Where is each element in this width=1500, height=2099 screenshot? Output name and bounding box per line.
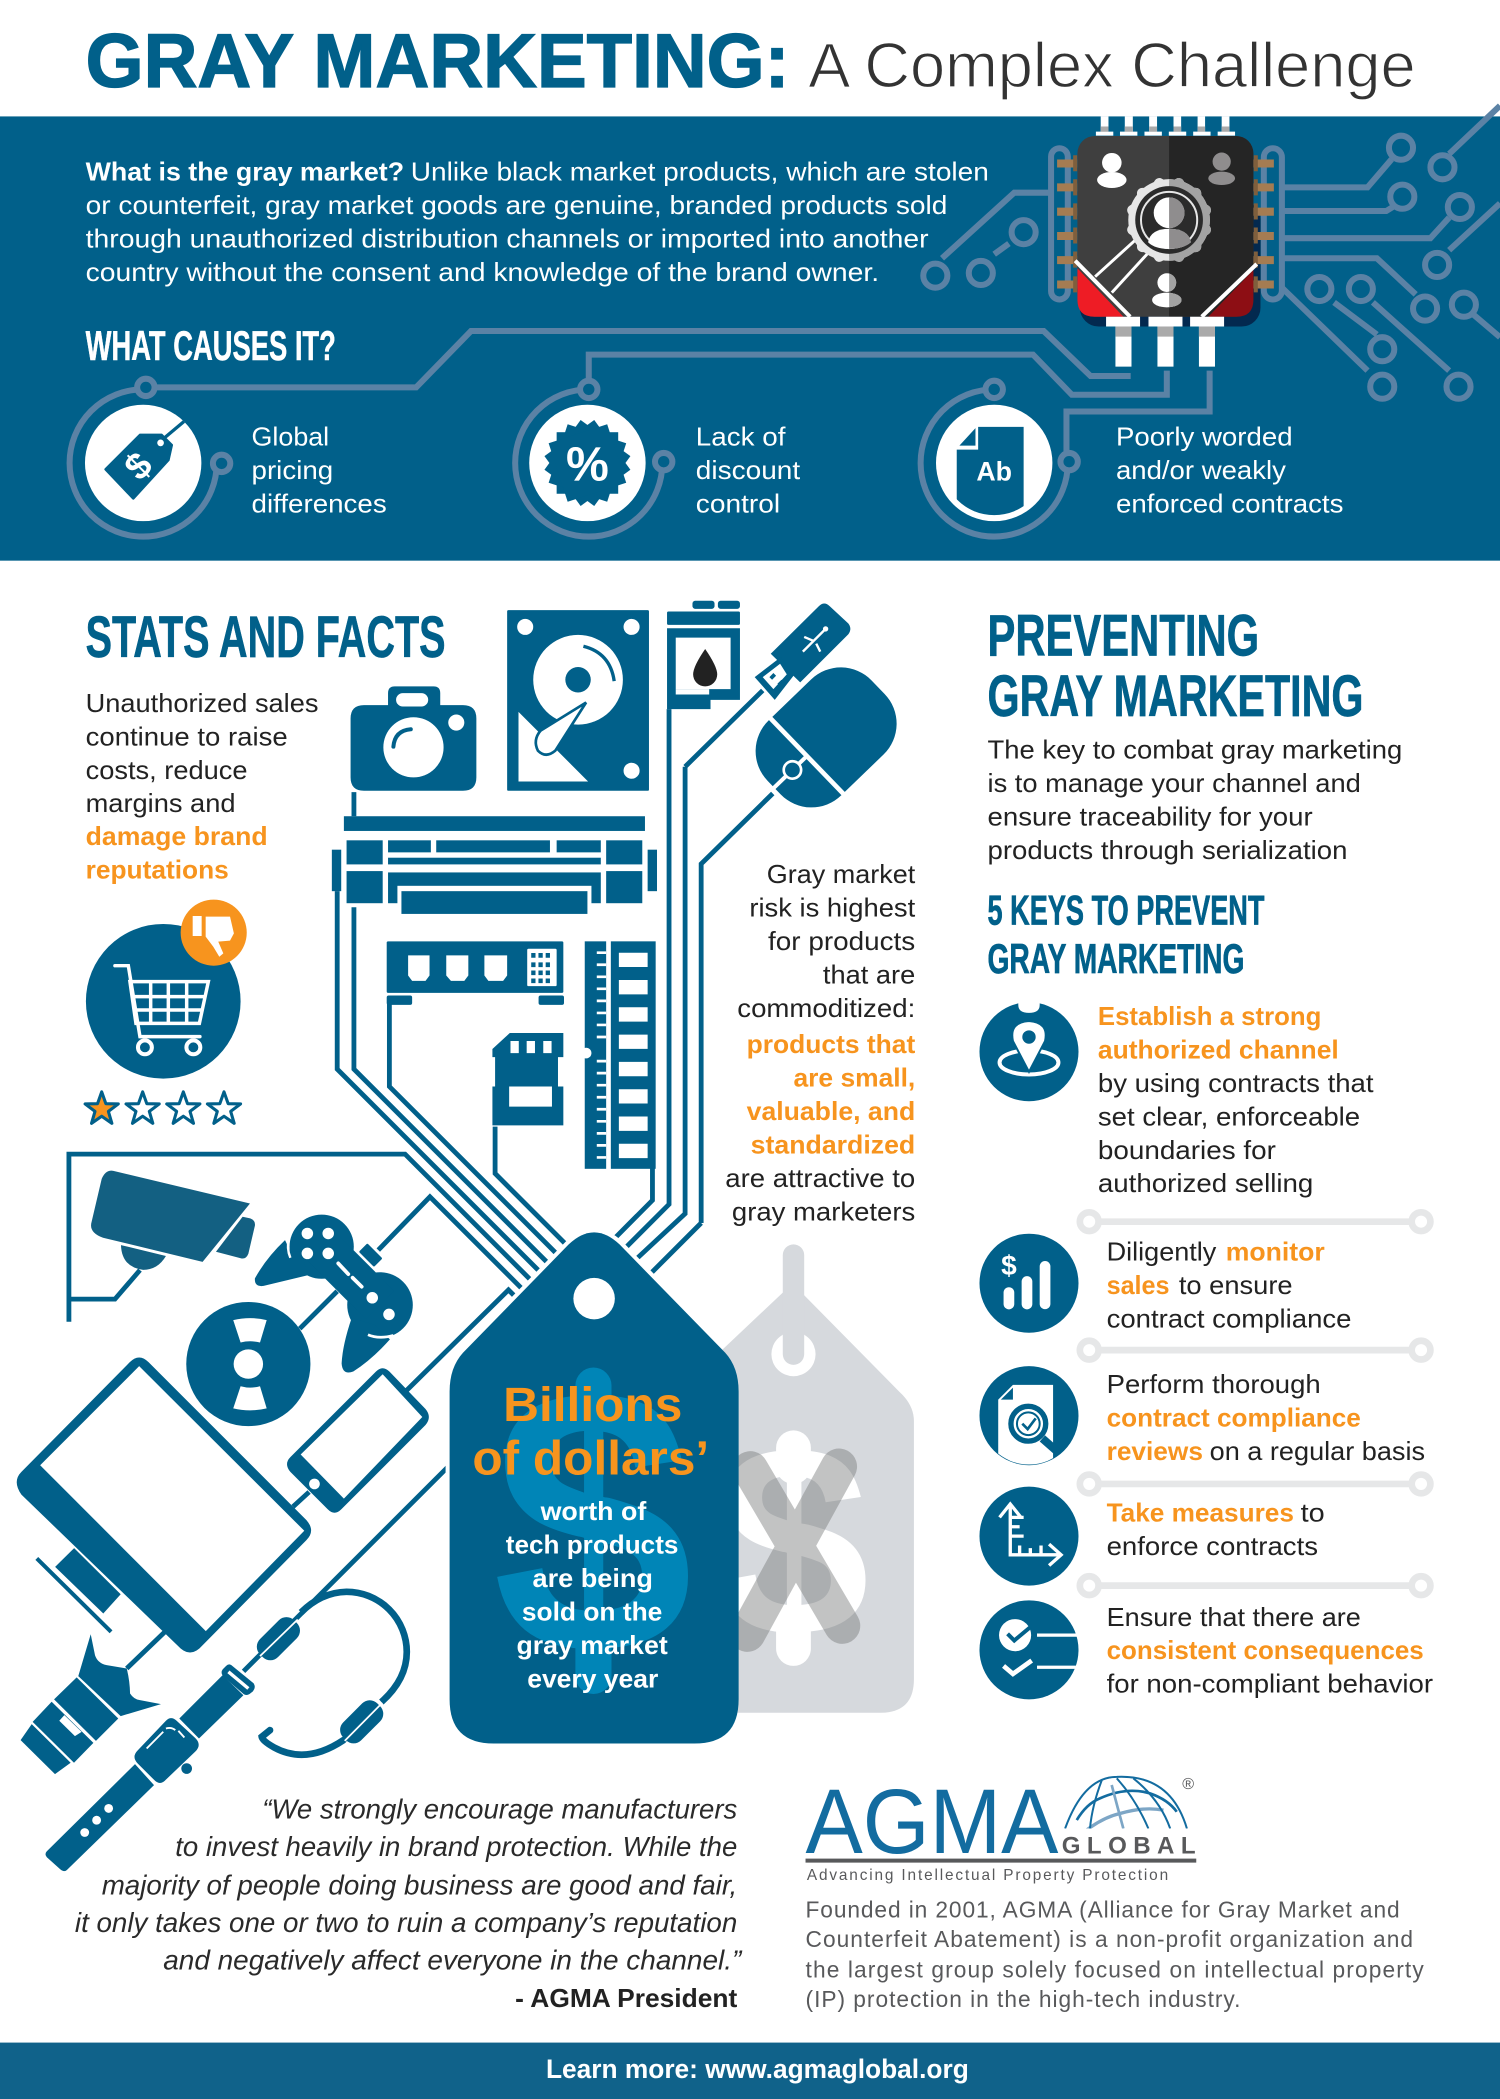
icon: globe [1065,1777,1187,1830]
heading: stats and facts: STATS AND FACTS [86,605,446,670]
icon: percent burst: % [566,437,609,491]
icon: smartphone [287,1368,429,1513]
text: about AGMA: the largest group solely focused on intellectual property [806,1957,1424,1983]
key 4: enforce contracts: Take measures [1107,1499,1294,1527]
quote [75,1793,743,2013]
icon: mouse [735,649,915,828]
text: gray market risk: standardized [751,1131,915,1159]
icon: security camera [91,1171,255,1270]
circuit traces [146,106,1500,462]
key 1: authorized channel: Establish a strong [1098,1003,1321,1031]
title: A Complex Challenge [808,31,1416,101]
cause 2: lack of discount control: control [696,490,780,518]
icon: ram module [581,941,656,1169]
key 1: authorized channel: authorized selling [1098,1170,1313,1198]
icon: headset [252,1592,407,1755]
text: unauthorized sales: costs, reduce [86,757,248,785]
quote: majority of people doing business are good and fair, [102,1870,737,1901]
icon: checklist [979,1600,1079,1699]
text: unauthorized sales: continue to raise [86,723,288,751]
icon: dollar bars [979,1234,1079,1333]
icon: gray price tag with crossed-out dollar: $ [718,1388,869,1693]
heading: what causes it: WHAT CAUSES IT? [86,322,336,369]
text: unauthorized sales: margins and [86,790,236,818]
icon: camera [351,686,476,791]
icon: flashlight [21,1634,161,1774]
text: gray market risk: products that [747,1031,916,1059]
text: gray market risk: are attractive to [725,1165,915,1193]
key 5: consistent consequences [979,1600,1434,1699]
cause 3: poorly worded contracts: Poorly worded [1116,424,1293,452]
key 1: authorized channel: by using contracts that [1098,1070,1374,1098]
icon: dollar bars: $ [1001,1250,1017,1281]
cause 1: global pricing differences [70,379,387,537]
heading: 5 keys: 5 KEYS TO PREVENT [988,887,1264,934]
icon: price tag: $ [116,443,160,488]
text: definition: or counterfeit, gray market goods are genuine, branded products sold [86,192,947,220]
heading: preventing gray marketing [988,604,1364,729]
text: gray market risk: valuable, and [747,1098,915,1126]
key 3: compliance reviews [979,1366,1425,1472]
text: definition: What is the gray market? [86,159,404,187]
cause 3: poorly worded contracts [921,381,1343,537]
quote: to invest heavily in brand protection. While the [175,1831,737,1862]
text: definition: through unauthorized distribution channels or imported into another [86,226,929,254]
key 1: authorized channel: set clear, enforceable [1098,1103,1360,1131]
logo: AGMA Global: GLOBAL [1062,1833,1196,1860]
text: gray market risk: that are [823,961,915,989]
text: unauthorized sales: Unauthorized sales [86,690,318,718]
key 2: monitor sales: monitor [1226,1238,1325,1266]
key 4: enforce contracts: enforce contracts [1107,1533,1318,1561]
icon: router [387,941,564,1005]
key 2: monitor sales [979,1234,1351,1333]
quote: it only takes one or two to ruin a company’s reputation [75,1907,737,1938]
icon: percent burst [544,420,630,506]
cause 3: poorly worded contracts: enforced contracts [1116,490,1343,518]
text: billions of dollars: every year [527,1665,658,1693]
text: billions of dollars: sold on the [522,1598,662,1626]
text: billions of dollars: Billions [503,1378,682,1432]
key 3: compliance reviews: on a regular basis [1210,1438,1425,1466]
cause 1: global pricing differences: Global [252,424,329,452]
footer [0,2043,1500,2099]
icon: axes [979,1487,1079,1586]
text: billions of dollars: gray market [517,1632,668,1660]
text: about AGMA [806,1896,1424,2012]
key 5: consistent consequences: consistent consequences [1107,1637,1424,1665]
title: GRAY MARKETING: [86,19,789,104]
text: unauthorized sales: reputations [86,856,229,884]
device wiring [69,690,773,1671]
icon: ram expansion slot [332,816,657,915]
heading: 5 keys [988,887,1264,982]
text: billions of dollars: of dollars’ [472,1432,709,1486]
key 4: enforce contracts: to [1301,1499,1325,1527]
icon: document and magnifier [979,1366,1079,1472]
key 5: consistent consequences: Ensure that there are [1107,1604,1361,1632]
cause 2: lack of discount control [515,381,800,537]
icon: main price tag [450,1232,739,1744]
panel: what is the gray market [0,106,1500,561]
text: billions of dollars: worth of [540,1498,647,1526]
text: gray market risk: commoditized: [737,995,915,1023]
key 1: authorized channel: authorized channel [1098,1036,1339,1064]
text: gray market risk: for products [768,928,915,956]
cause 2: lack of discount control: Lack of [696,424,786,452]
text: billions of dollars [472,1378,709,1693]
icon: tablet [17,1357,311,1653]
key 2: monitor sales: contract compliance [1107,1305,1351,1333]
icon: document [956,426,1024,516]
text: gray market risk: risk is highest [749,895,915,923]
icon: game controller [255,1215,413,1373]
icon: price tag [106,421,184,498]
title [86,19,1416,104]
icon: shopping cart with thumbs down [86,900,247,1079]
text: gray market risk: are small, [793,1065,915,1093]
text: unauthorized sales [86,690,318,884]
heading: preventing gray marketing: PREVENTING [988,604,1259,669]
key 1: authorized channel: boundaries for [1098,1137,1276,1165]
cause 3: poorly worded contracts: and/or weakly [1116,457,1286,485]
icon: document: Ab [976,456,1012,486]
rating stars [85,1092,241,1123]
text: about AGMA: Counterfeit Abatement) is a non-profit organization and [806,1926,1413,1952]
icon: main price tag: $ [492,1309,693,1734]
text: gray market risk [725,861,916,1226]
icon: smartwatch [45,1664,255,1871]
quote: and negatively affect everyone in the channel.” [163,1945,743,1976]
text: unauthorized sales: damage brand [86,823,268,851]
icon: gray price tag with crossed-out dollar [669,1244,914,1713]
text: about AGMA: (IP) protection in the high-tech industry. [806,1986,1240,2012]
icon: usb stick [755,603,850,700]
text: definition [86,159,989,287]
text: definition: country without the consent and knowledge of the brand owner. [86,259,879,287]
logo: AGMA Global: Advancing Intellectual Property Protection [807,1867,1168,1884]
icon: sd card [492,1033,563,1125]
text: prevention intro: products through serialization [988,837,1347,865]
icon: location pin [979,1001,1079,1101]
text: billions of dollars: are being [533,1565,653,1593]
key 3: compliance reviews: contract compliance [1107,1404,1361,1432]
key 5: consistent consequences: for non-compliant behavior [1107,1671,1434,1699]
key 2: monitor sales: to ensure [1179,1272,1293,1300]
quote: “We strongly encourage manufacturers [262,1793,737,1824]
text: billions of dollars: tech products [506,1532,678,1560]
quote: - AGMA President [515,1983,738,2013]
key 2: monitor sales: Diligently [1107,1238,1216,1266]
text: prevention intro [988,737,1402,865]
footer: Learn more: www.agmaglobal.org [546,2054,969,2084]
key 3: compliance reviews: Perform thorough [1107,1371,1321,1399]
icon: disc [186,1302,310,1426]
logo: AGMA Global: AGMA [806,1769,1059,1873]
text: definition: Unlike black market products, which are stolen [411,159,989,187]
cause 1: global pricing differences: differences [252,490,387,518]
heading: 5 keys: GRAY MARKETING [988,935,1244,982]
icon: hard drive [507,610,649,791]
cause 2: lack of discount control: discount [696,457,800,485]
logo: AGMA Global: ® [1182,1775,1194,1793]
icon: microchip [1051,116,1282,367]
text: prevention intro: is to manage your channel and [988,770,1361,798]
key 2: monitor sales: sales [1107,1272,1169,1300]
icon: ink cartridge [667,601,740,709]
key 4: enforce contracts [979,1487,1325,1586]
text: prevention intro: The key to combat gray marketing [988,737,1402,765]
key 1: authorized channel [979,1001,1374,1198]
text: about AGMA: Founded in 2001, AGMA (Alliance for Gray Market and [806,1896,1400,1922]
key 3: compliance reviews: reviews [1107,1438,1203,1466]
cause 1: global pricing differences: pricing [252,457,333,485]
logo: AGMA Global [806,1769,1196,1884]
text: gray market risk: gray marketers [732,1198,915,1226]
text: gray market risk: Gray market [767,861,915,889]
text: prevention intro: ensure traceability for your [988,804,1313,832]
